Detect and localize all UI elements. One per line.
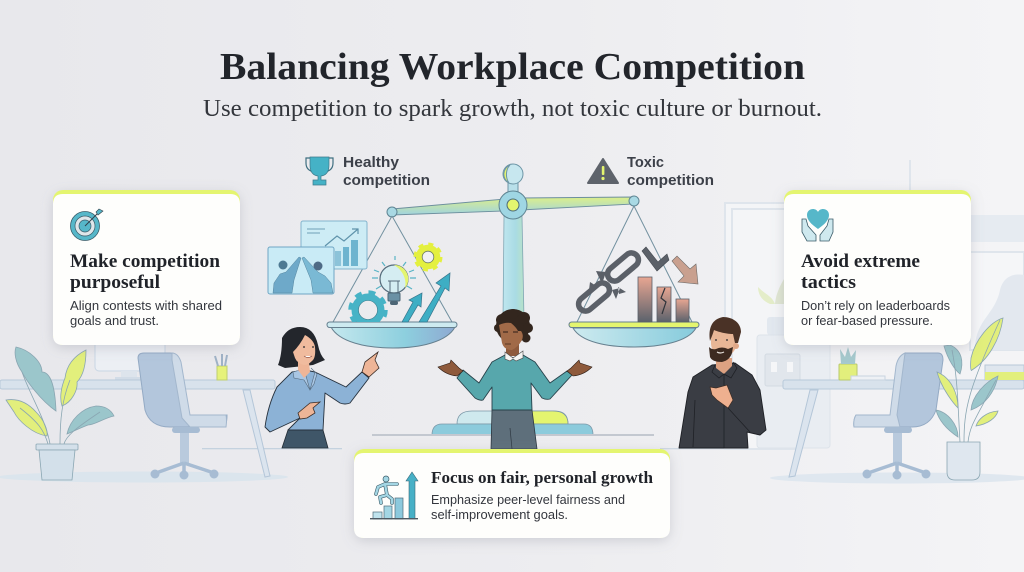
toxic side: falling bars [638,277,689,322]
skirt [282,430,328,448]
collar and seams [693,362,750,448]
card heading: Make competition [70,252,221,272]
card body line 2: self-improvement goals. [431,508,568,522]
right pan strings [577,206,692,322]
card heading: Focus on fair, personal growth [431,468,653,487]
scale hub [499,191,527,219]
panel: focus on fair, personal growth [354,449,670,538]
label text: Toxic [627,154,664,171]
card body line 2: or fear-based pressure. [801,313,933,328]
healthy side: high five panel [268,247,334,294]
healthy side: teal gear [350,292,386,328]
scale base [432,411,593,435]
icon: target [70,209,103,240]
shirt and arms [265,370,369,432]
healthy side: light bulb [372,256,416,305]
neck [716,358,732,374]
hair [710,317,741,343]
left pan strings [333,216,452,322]
right desk with plant and books [783,347,1024,477]
background: door and window [725,160,1024,449]
toxic side: broken chain [576,250,641,314]
icon: trophy [306,157,333,185]
label text: Healthy [343,154,400,171]
scale finial [503,164,523,194]
hand on chest [710,385,733,408]
face [499,323,523,350]
subtitle: Use competition to spark growth, not toxic culture or burnout. [203,96,822,122]
toxic competition label [588,154,714,189]
card heading line 2: tactics [801,273,856,293]
card body line 2: goals and trust. [70,313,159,328]
icon: climbing growth chart [370,472,418,519]
background: water cooler and faded plant [757,276,830,448]
healthy side: chart panel [301,221,367,269]
collar [505,351,523,361]
right pan [569,322,699,347]
healthy competition label [306,154,430,189]
sweater and arms [457,355,572,410]
face [711,328,736,357]
left desk with monitor and pen cup [0,335,275,477]
toxic side: down arrows [642,247,698,284]
face [293,335,315,365]
left pan [327,322,457,348]
card body: Emphasize peer-level fairness and [431,493,625,507]
icon: warning triangle [588,159,618,183]
scale post [503,216,524,320]
person: central man shrugging [438,309,592,449]
beard [709,347,733,362]
neck [506,344,519,356]
neck [298,362,310,378]
left potted plant [6,347,114,480]
right potted plant [936,318,1003,480]
hair [278,327,325,368]
healthy side: growth arrows [402,273,450,322]
balance scale [327,164,699,436]
card heading: Avoid extreme [801,252,920,272]
dark shirt [679,363,766,448]
collar [293,368,317,390]
left office chair [138,353,227,480]
scale beam [392,197,634,215]
card heading line 2: purposeful [70,273,160,293]
label text line 2: competition [343,172,430,189]
right office chair [854,353,943,480]
floor shadows [0,448,1024,484]
person: woman pointing [265,327,379,448]
pointing hands [298,402,320,419]
title: Balancing Workplace Competition [220,46,805,88]
icon: heart in hands [802,209,833,241]
panel: avoid extreme tactics [784,190,971,345]
panel: make competition purposeful [53,190,240,345]
healthy side: yellow gear [416,244,440,270]
label text line 2: competition [627,172,714,189]
person: bearded man, hand on chest [679,317,766,448]
card body: Don’t rely on leaderboards [801,298,950,313]
curly hair [494,309,533,343]
floor line [372,434,654,436]
hands [438,360,463,376]
card body: Align contests with shared [70,298,222,313]
trousers [491,410,537,449]
